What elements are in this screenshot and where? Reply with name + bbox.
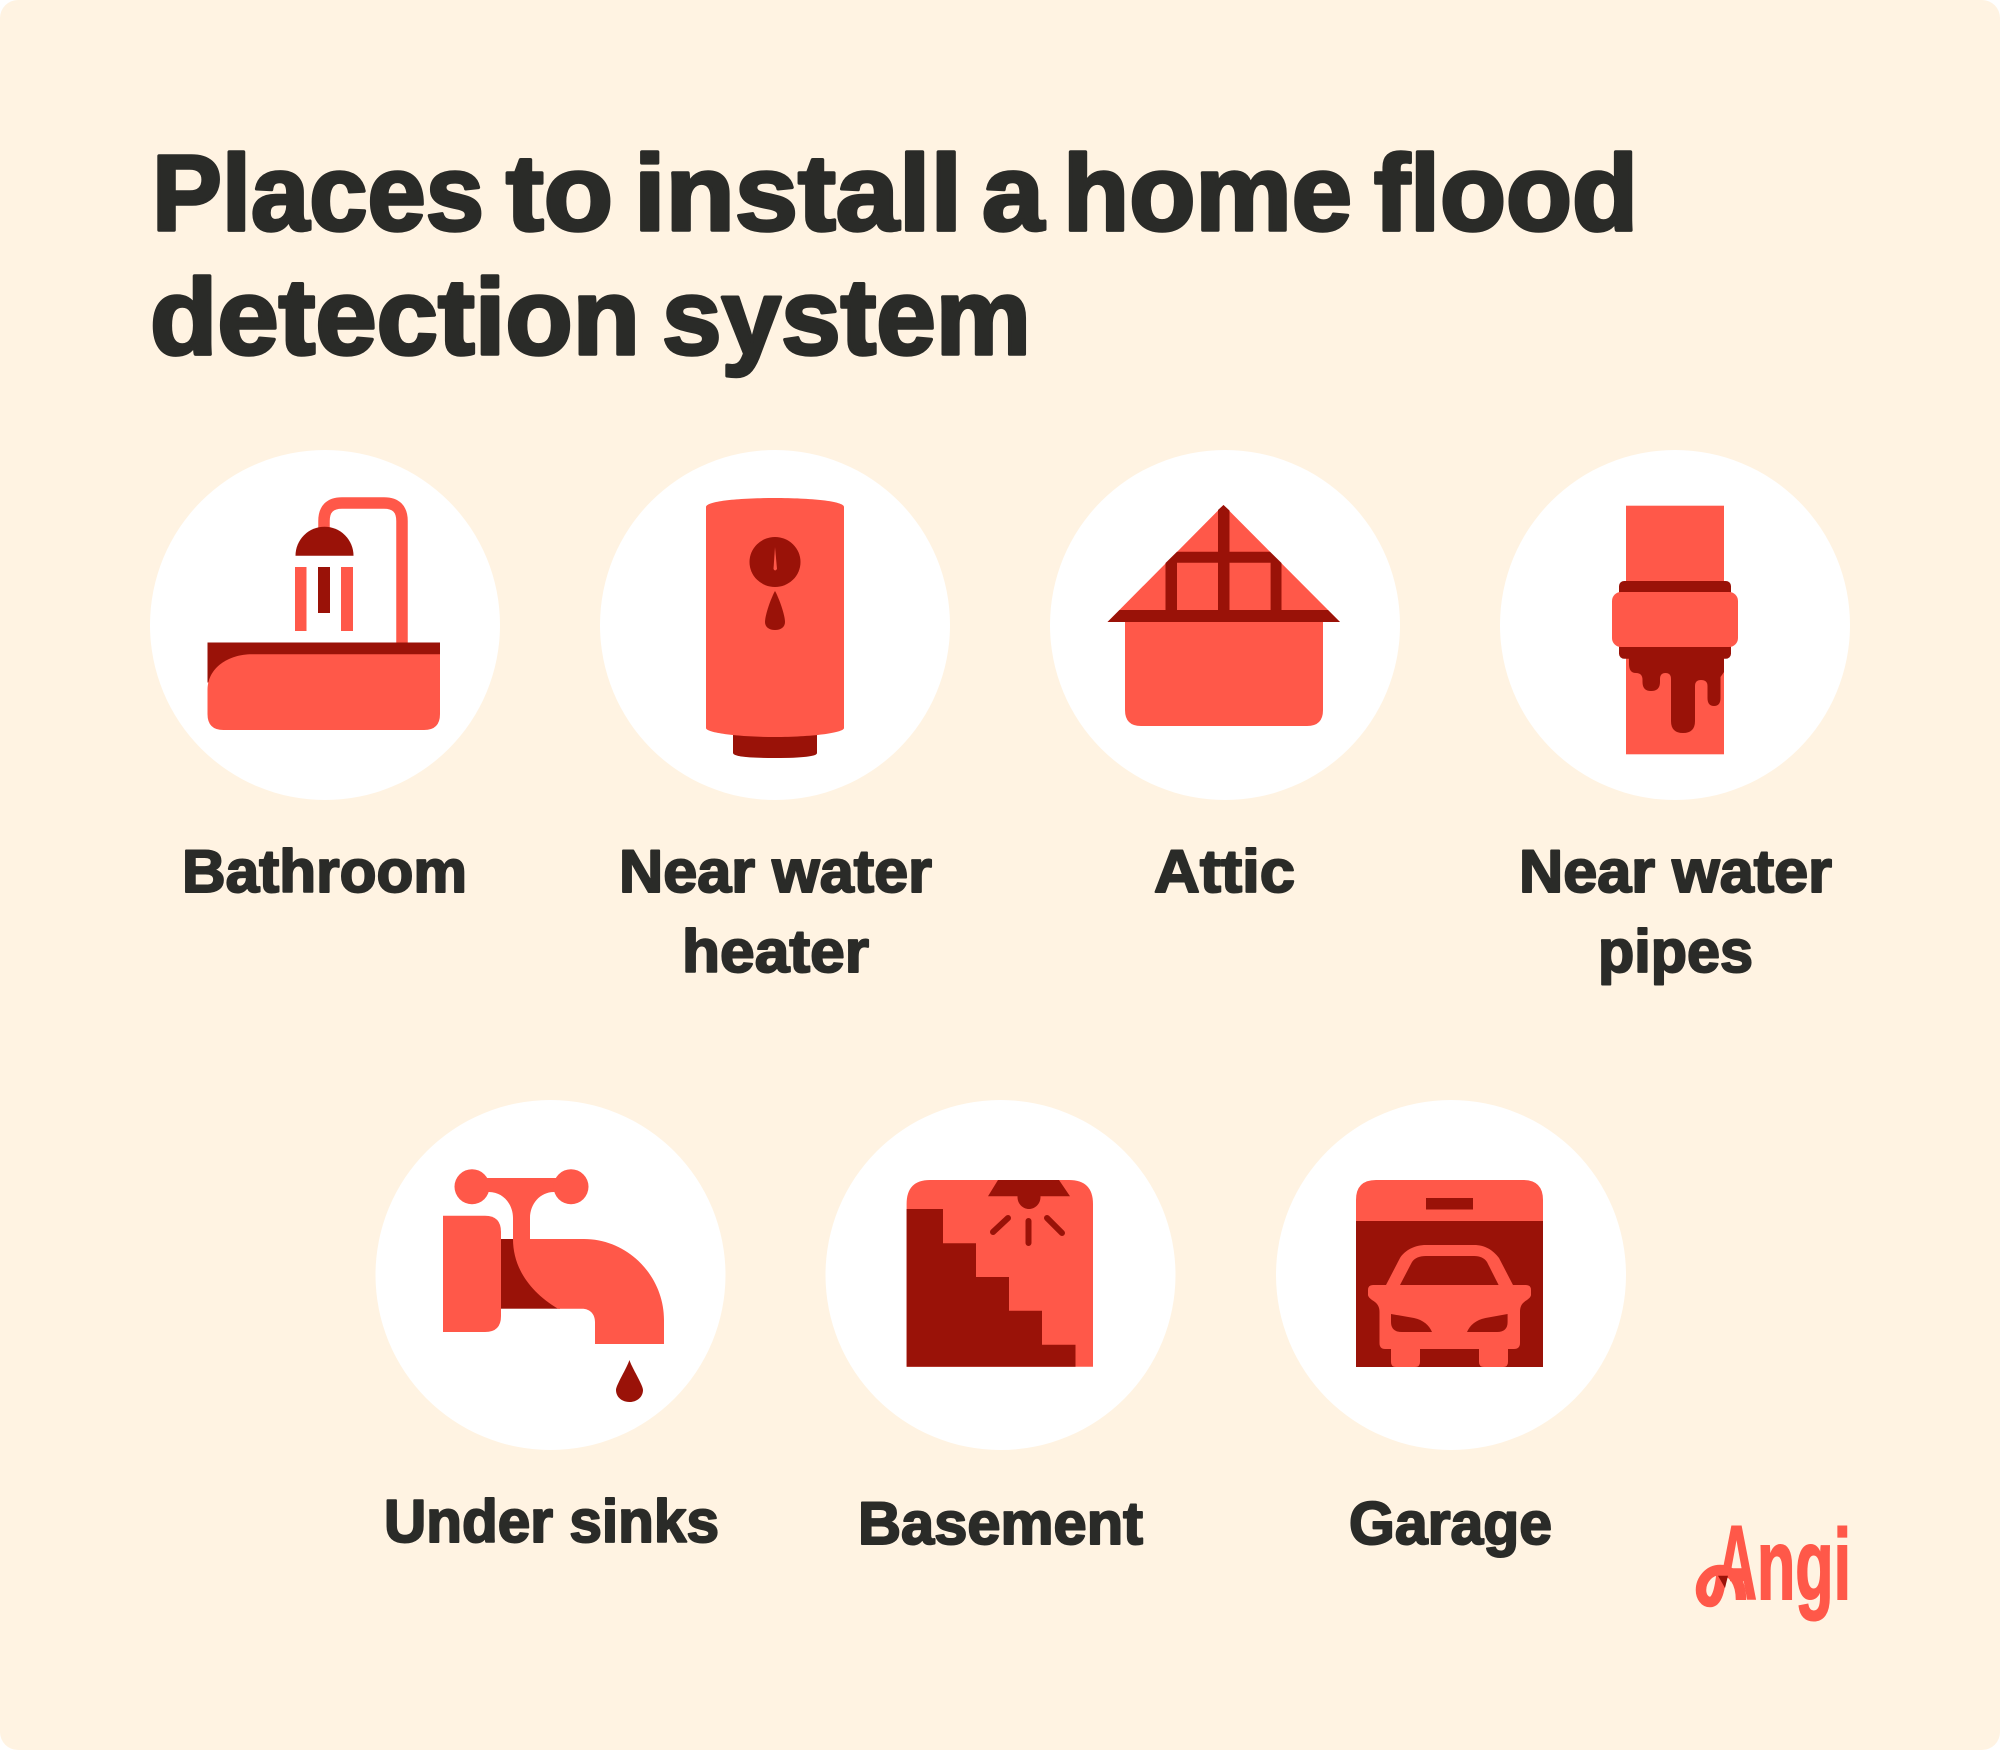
title: detection [150, 256, 640, 377]
label: under sinks: Under sinks [384, 1488, 719, 1555]
panel: bathroom [150, 450, 500, 905]
title: system [662, 256, 1031, 377]
title [150, 132, 1638, 377]
circle: water pipes [1500, 450, 1850, 800]
panel: attic [1050, 450, 1400, 905]
circle: water heater [600, 450, 950, 800]
title: a [982, 132, 1045, 253]
logo: Angi [1696, 1526, 1848, 1622]
panel: under sinks [376, 1100, 726, 1555]
label: near water pipes: Near water [1519, 838, 1832, 905]
label: basement: Basement [858, 1490, 1143, 1557]
title: install [634, 132, 962, 253]
logo: Angi: A [1716, 1504, 1757, 1622]
label: near water heater: heater [682, 918, 869, 985]
circle: attic [1050, 450, 1400, 800]
icon: bathtub and shower [208, 503, 440, 730]
label: attic: Attic [1154, 838, 1295, 905]
logo: Angi: ngi [1757, 1509, 1851, 1621]
title: to [506, 132, 613, 253]
title: home [1063, 132, 1352, 253]
circle: under sinks [376, 1100, 726, 1450]
panel: water heater [600, 450, 950, 985]
label: bathroom: Bathroom [182, 838, 467, 905]
icon: garage and car [1356, 1180, 1543, 1367]
panel: garage [1276, 1100, 1626, 1557]
icon: basement stairs and lamp [907, 1180, 1093, 1367]
icon: dripping faucet [443, 1169, 664, 1402]
title: flood [1374, 132, 1638, 253]
panel: water pipes [1500, 450, 1850, 985]
icon: water heater [706, 498, 844, 758]
icon: attic house [1108, 505, 1340, 726]
panel: basement [826, 1100, 1176, 1557]
label: near water heater [619, 838, 932, 985]
circle: bathroom [150, 450, 500, 800]
circle: basement [826, 1100, 1176, 1450]
label: near water heater: Near water [619, 838, 932, 905]
title: Places [152, 132, 484, 253]
circle: garage [1276, 1100, 1626, 1450]
label: near water pipes: pipes [1598, 918, 1753, 985]
icon: leaking pipe [1612, 506, 1738, 754]
label: garage: Garage [1349, 1490, 1552, 1557]
label: near water pipes [1519, 838, 1832, 985]
